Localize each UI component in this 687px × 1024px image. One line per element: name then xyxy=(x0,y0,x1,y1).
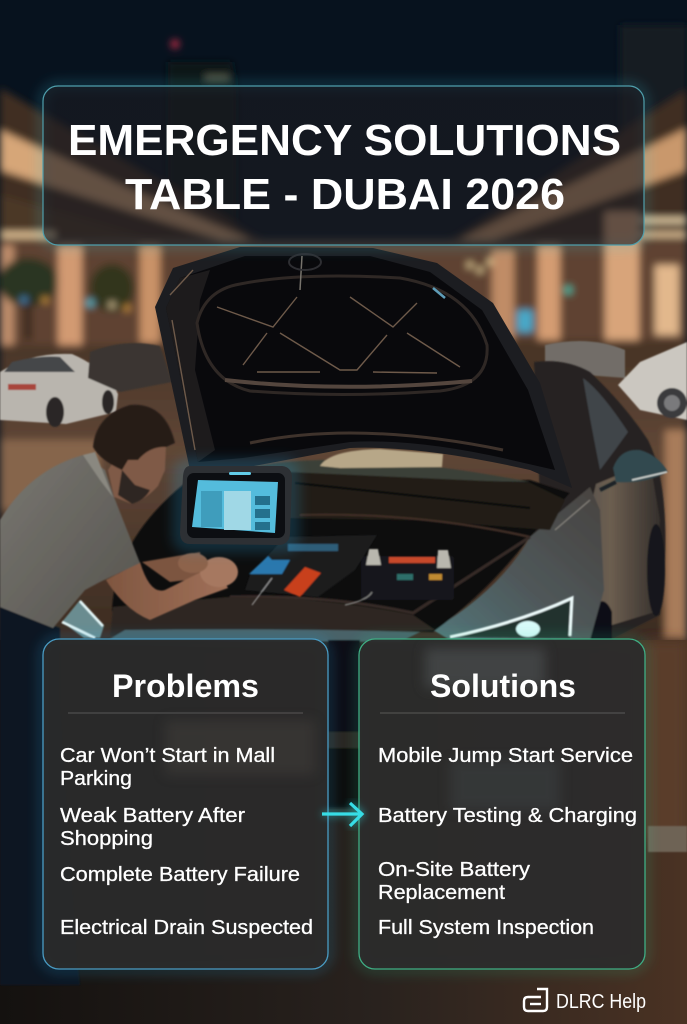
jump starter unit with red clamp xyxy=(245,535,377,605)
title panel xyxy=(42,85,645,246)
panel: solutions xyxy=(358,638,646,970)
problem: complete failure: Complete Battery Failure xyxy=(60,863,300,886)
solution: on-site replacement xyxy=(378,858,531,904)
arrow: problems to solutions xyxy=(322,803,362,826)
solution: jump start: Mobile Jump Start Service xyxy=(378,744,633,767)
battery xyxy=(345,549,454,605)
problem: weak battery: Weak Battery After xyxy=(60,804,245,827)
problem: weak battery xyxy=(60,804,245,850)
problem: car won't start: Car Won’t Start in Mall xyxy=(60,744,275,767)
mechanic forearm and hands xyxy=(106,552,238,620)
logo: DLRC Help xyxy=(524,989,646,1013)
mechanic xyxy=(0,405,238,985)
title text: EMERGENCY SOLUTIONS xyxy=(68,116,621,165)
car hood opened xyxy=(155,247,572,488)
solution: system inspection: Full System Inspection xyxy=(378,916,594,939)
solution: testing and charging: Battery Testing & Charging xyxy=(378,804,637,827)
background parked cars xyxy=(0,341,687,427)
left headlight xyxy=(62,600,104,638)
car: sedan body and engine bay xyxy=(108,361,665,808)
mechanic shirt xyxy=(0,455,140,628)
panel: problems xyxy=(42,638,329,970)
problem: weak battery: Shopping xyxy=(60,827,153,850)
icon: logo mark xyxy=(524,989,547,1011)
side mirror xyxy=(600,450,668,490)
problem: car won't start xyxy=(60,744,275,790)
logo: DLRC Help: DLRC Help xyxy=(556,991,646,1013)
problem: car won't start: Parking xyxy=(60,767,132,790)
mechanic trousers xyxy=(0,605,80,985)
right headlight xyxy=(450,596,573,638)
solution: on-site replacement: Replacement xyxy=(378,881,505,904)
solution: on-site replacement: On-Site Battery xyxy=(378,858,531,881)
solutions heading: Solutions xyxy=(430,668,576,704)
diagnostic tablet xyxy=(172,458,300,553)
title text xyxy=(68,116,621,219)
title text: TABLE - DUBAI 2026 xyxy=(125,170,565,219)
problems heading: Problems xyxy=(112,668,259,704)
mechanic head xyxy=(93,405,175,504)
problem: electrical drain: Electrical Drain Suspected xyxy=(60,916,313,939)
